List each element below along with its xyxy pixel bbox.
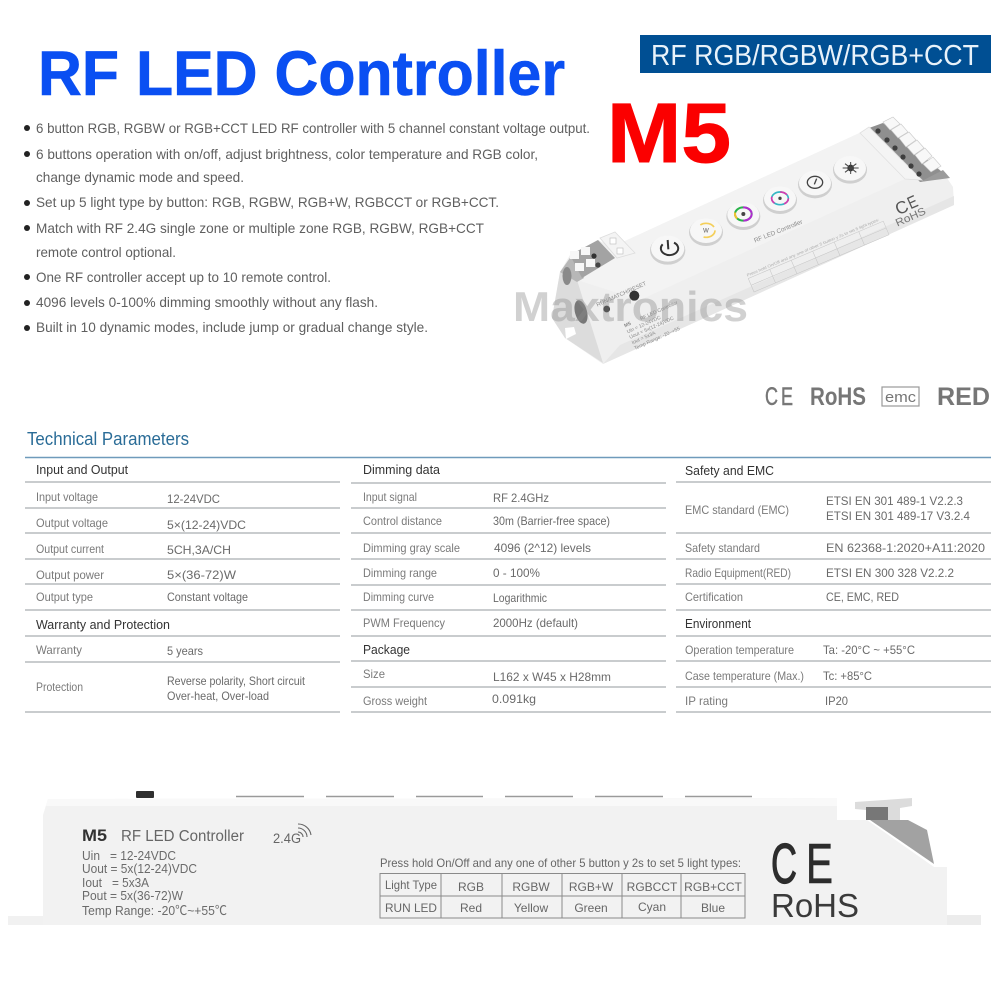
- row: EMC standard: ETSI EN 301 489-1 V2.2.3: [826, 494, 963, 508]
- row: output voltage: 5×(12-24)VDC: [167, 518, 246, 532]
- device label: specifications: Uin = 12-24VDC: [626, 315, 662, 335]
- row: case temperature: Case temperature (Max.): [685, 669, 804, 683]
- row: input voltage: Input voltage: [36, 490, 98, 504]
- row: gray scale: Dimming gray scale: [363, 541, 460, 555]
- row: IP rating: IP rating: [685, 694, 728, 708]
- certification marks: RoHS: [810, 383, 866, 411]
- feature list: 4096 levels 0-100% dimming smoothly without any flash.: [36, 294, 378, 310]
- light type table: Cyan: [638, 900, 666, 914]
- product buttons and labels: [596, 156, 928, 352]
- row: EMC standard: EMC standard (EMC): [685, 503, 789, 517]
- icon: 2.4G wireless: 2.4G: [273, 831, 301, 846]
- icon: 2.4G wireless: [273, 824, 311, 846]
- row: output type: Constant voltage: [167, 590, 248, 604]
- device label: RUN MATCH RESET: RUN/MATCH/RESET: [596, 281, 648, 308]
- row: IP rating: IP20: [825, 694, 848, 708]
- row: output current: 5CH,3A/CH: [167, 543, 231, 557]
- row: operation temperature: Ta: -20°C ~ +55°C: [823, 643, 915, 657]
- row: gray scale: 4096 (2^12) levels: [494, 541, 591, 555]
- banner: product types: RF RGB/RGBW/RGB+CCT: [651, 40, 979, 72]
- feature list: One RF controller accept up to 10 remote control.: [36, 269, 331, 285]
- row: radio equipment: ETSI EN 300 328 V2.2.2: [826, 566, 954, 580]
- row: input signal: RF 2.4GHz: [493, 491, 549, 505]
- controller body: [552, 117, 954, 364]
- row: gross weight: Gross weight: [363, 694, 428, 708]
- row: warranty: Warranty: [36, 643, 82, 657]
- row: PWM frequency: [363, 616, 578, 630]
- instruction text: Press hold On/Off and any one of other 5 button y 2s to set 5 light types:: [380, 856, 741, 870]
- feature list: 6 button RGB, RGBW or RGB+CCT LED RF controller with 5 channel constant voltage output.: [36, 120, 590, 136]
- light type table: RUN LED: [385, 901, 437, 915]
- row: output power: 5×(36-72)W: [167, 568, 237, 582]
- button: RGB colour ring: [726, 202, 760, 230]
- row: output power: [36, 568, 237, 582]
- light type table: Green: [574, 901, 608, 915]
- row: EMC standard: [685, 494, 970, 523]
- row: PWM frequency: 2000Hz (default): [493, 616, 578, 630]
- certification marks: C: [765, 383, 778, 411]
- section: Warranty and Protection: Warranty and Protection: [36, 617, 170, 632]
- row: radio equipment: [685, 566, 954, 580]
- row: gray scale: [363, 541, 591, 555]
- controller body: [8, 798, 981, 925]
- light type table: Blue: [701, 901, 725, 915]
- device label: CE RoHS: C: [892, 196, 911, 219]
- heading: Technical Parameters: Technical Parameters: [27, 429, 189, 449]
- row: output power: Output power: [36, 568, 104, 582]
- certification marks: emc: [885, 389, 917, 406]
- panel: dimming data and package: [351, 462, 666, 712]
- row: output current: Output current: [36, 542, 105, 556]
- row: input signal: Input signal: [363, 490, 417, 504]
- device specifications: [82, 848, 227, 918]
- feature list: [24, 120, 590, 335]
- section: Safety and EMC: Safety and EMC: [685, 463, 774, 478]
- light type table: RGB: [458, 880, 484, 894]
- title: RF LED Controller: [38, 39, 565, 109]
- button: brightness sun: [833, 156, 867, 184]
- device label: specifications: M5: [623, 321, 632, 329]
- device label: specifications: RF LED Controller: [639, 300, 679, 322]
- row: dimming range: 0 - 100%: [493, 566, 540, 580]
- feature list: Match with RF 2.4G single zone or multiple zone RGB, RGBW, RGB+CCT: [36, 220, 484, 236]
- light type table: Red: [460, 901, 482, 915]
- row: warranty: [36, 643, 203, 658]
- light type table: Light Type: [385, 878, 437, 892]
- indicator holes: [603, 291, 639, 312]
- device label: light type table: [746, 216, 889, 292]
- row: safety standard: Safety standard: [685, 541, 760, 555]
- row: size: [363, 667, 611, 684]
- light type table: RGB+W: [569, 880, 614, 894]
- switch: [136, 791, 154, 798]
- model name M5: M5: [607, 86, 731, 180]
- button: white channel: W: [703, 229, 709, 235]
- button edges: [236, 796, 752, 798]
- button: speed dial: [798, 171, 832, 198]
- product photo: M5 controller, angled view: [552, 117, 954, 364]
- row: protection: Protection: [36, 680, 83, 694]
- row: size: Size: [363, 667, 385, 681]
- device specifications: Temp Range: -20℃~+55℃: [82, 903, 227, 918]
- device model heading: M5: [82, 826, 107, 845]
- row: protection: Over-heat, Over-load: [167, 689, 269, 703]
- row: control distance: [363, 514, 610, 528]
- CE mark and RoHS: C: [771, 832, 797, 896]
- row: certification: Certification: [685, 590, 743, 604]
- button: power: [650, 236, 685, 265]
- product photo: M5 controller, side label view: [8, 791, 981, 925]
- row: warranty: 5 years: [167, 644, 203, 658]
- device label: RF LED Controller: RF LED Controller: [753, 219, 804, 245]
- row: gross weight: [363, 692, 536, 708]
- feature list: Built in 10 dynamic modes, include jump or gradual change style.: [36, 319, 428, 335]
- row: IP rating: [685, 694, 848, 708]
- section: Package: Package: [363, 642, 410, 657]
- device model heading: RF LED Controller: [121, 828, 244, 845]
- feature list: remote control optional.: [36, 244, 176, 260]
- feature list: 6 buttons operation with on/off, adjust brightness, color temperature and RGB color,: [36, 146, 538, 162]
- row: control distance: Control distance: [363, 514, 442, 528]
- row: radio equipment: Radio Equipment(RED): [685, 566, 791, 580]
- feature list: Set up 5 light type by button: RGB, RGBW, RGB+W, RGBCCT or RGB+CCT.: [36, 194, 499, 210]
- left terminal block: [560, 232, 635, 285]
- row: safety standard: [685, 541, 985, 555]
- row: gross weight: 0.091kg: [492, 692, 536, 706]
- light type table: RGBCCT: [627, 880, 678, 894]
- certification marks: [765, 383, 990, 411]
- section: Dimming data: Dimming data: [363, 462, 441, 477]
- row: dimming range: [363, 566, 540, 580]
- CE mark and RoHS: RoHS: [771, 887, 859, 924]
- row: dimming curve: Logarithmic: [493, 591, 547, 605]
- device label: specifications: Uout = 5x(12-24)VDC: [629, 316, 675, 341]
- device label: light type table: Press hold On/Off and any one of other 5 button y 2s to set 5 light types:: [746, 217, 880, 278]
- light type table: RGBW: [512, 880, 550, 894]
- device label: CE RoHS: [892, 191, 928, 229]
- CE mark and RoHS: E: [806, 832, 833, 896]
- row: output type: Output type: [36, 590, 93, 604]
- device specifications: = 12-24VDC: [110, 848, 176, 863]
- row: case temperature: Tc: +85°C: [823, 669, 872, 683]
- button: RGB mode ring: [763, 186, 797, 214]
- light type table: [380, 874, 745, 918]
- watermark: Maxtronics: [513, 283, 748, 330]
- device label: specifications: Temp Range: -20~+55: [633, 326, 681, 352]
- certification marks: E: [781, 383, 793, 411]
- row: control distance: 30m (Barrier-free space): [493, 514, 610, 528]
- row: dimming curve: Dimming curve: [363, 590, 434, 604]
- terminal connector: [855, 798, 934, 864]
- row: protection: Reverse polarity, Short circuit: [167, 674, 306, 688]
- row: dimming range: Dimming range: [363, 566, 437, 580]
- section: Environment: Environment: [685, 616, 751, 631]
- row: output voltage: Output voltage: [36, 516, 108, 530]
- section: Input and Output: Input and Output: [36, 462, 128, 477]
- row: EMC standard: ETSI EN 301 489-17 V3.2.4: [826, 509, 970, 523]
- device label: specifications: Iout = 5x3A: [631, 330, 657, 346]
- device specifications: Iout: [82, 875, 102, 890]
- row: output type: [36, 590, 248, 604]
- light type table: RGB+CCT: [684, 880, 742, 894]
- device label: CE RoHS: E: [904, 191, 921, 213]
- panel: input, output, warranty: [25, 462, 340, 712]
- row: protection: [36, 674, 306, 703]
- row: PWM frequency: PWM Frequency: [363, 616, 445, 630]
- light type table: Yellow: [514, 901, 548, 915]
- row: certification: [685, 590, 899, 604]
- row: size: L162 x W45 x H28mm: [493, 670, 611, 684]
- row: operation temperature: [685, 643, 915, 657]
- row: safety standard: EN 62368-1:2020+A11:2020: [826, 541, 985, 555]
- feature list: change dynamic mode and speed.: [36, 169, 244, 185]
- device label: CE RoHS: RoHS: [894, 205, 928, 229]
- device specifications: Pout = 5x(36-72)W: [82, 888, 184, 903]
- row: certification: CE, EMC, RED: [826, 590, 899, 604]
- row: input voltage: [36, 490, 220, 506]
- row: dimming curve: [363, 590, 547, 605]
- panel: safety, EMC, environment: [676, 463, 991, 712]
- button: white channel: [689, 218, 723, 246]
- device label: specifications: [623, 300, 689, 352]
- row: operation temperature: Operation temperature: [685, 643, 794, 657]
- certification marks: RED: [937, 383, 990, 411]
- row: input voltage: 12-24VDC: [167, 492, 220, 506]
- CE mark and RoHS: [771, 832, 859, 924]
- row: input signal: [363, 490, 549, 505]
- device model heading: [82, 826, 244, 845]
- device specifications: = 5x3A: [112, 875, 149, 890]
- row: output current: [36, 542, 231, 557]
- right terminal block: [860, 117, 950, 182]
- row: output voltage: [36, 516, 246, 532]
- device specifications: Uout = 5x(12-24)VDC: [82, 861, 197, 876]
- device specifications: Uin: [82, 848, 100, 863]
